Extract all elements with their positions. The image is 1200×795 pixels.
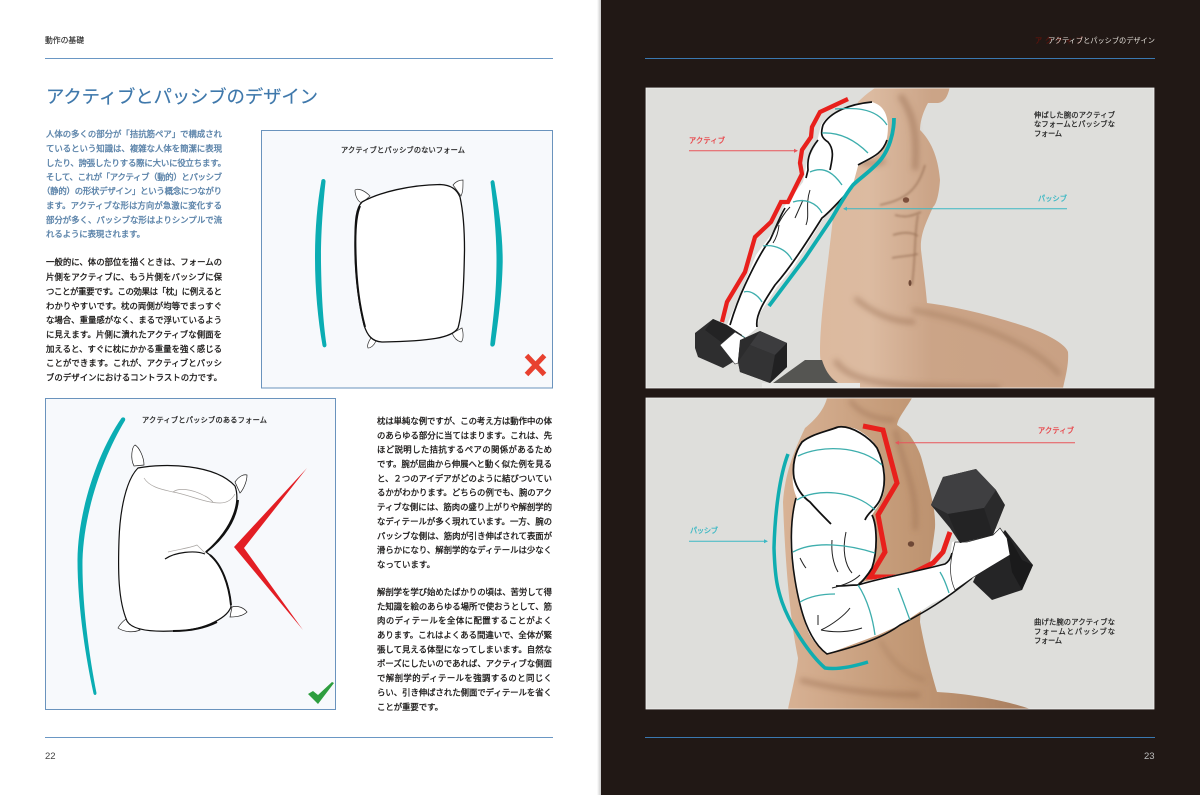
arm cross contours xyxy=(727,108,887,338)
active callout: アクティブ xyxy=(1038,426,1074,435)
pillow without weight xyxy=(355,184,464,342)
passive callout xyxy=(843,194,1067,211)
active callout: アクティブ xyxy=(689,136,725,145)
arm contour lines xyxy=(793,427,884,586)
arm contour lines xyxy=(730,102,887,327)
intro paragraph xyxy=(42,129,226,239)
intro paragraph: （静的）の形状デザイン」という概念につながり xyxy=(42,186,222,196)
torso xyxy=(820,86,1068,388)
grey crease lines xyxy=(144,478,235,553)
body column: further explanation xyxy=(377,416,553,712)
intro paragraph: 部分が多く、パッシブな形はよりシンプルで流 xyxy=(46,215,223,225)
icon: green check xyxy=(308,682,334,704)
thick active contour xyxy=(173,500,238,631)
body column: further explanation: ほど説明した拮抗するペアの関係があるため xyxy=(377,445,552,455)
drawn hand xyxy=(951,528,1010,590)
caption: extended arm: フォーム xyxy=(1034,129,1062,138)
body column: further explanation: ティブな側には、筋肉の盛り上がりや解剖学的 xyxy=(377,502,552,512)
body column: further explanation: なディテールが多く現れています。一方、腕の xyxy=(377,516,552,526)
intro paragraph: ます。アクティブな形は方向が急激に変化する xyxy=(46,200,222,210)
nipple xyxy=(908,541,914,547)
passive curve xyxy=(78,417,125,695)
caption: bent arm: フォームとパッシブな xyxy=(1034,627,1115,636)
body column: further explanation: のあらゆる部分に当てはまります。これは、先 xyxy=(377,430,552,440)
passive callout: パッシブ xyxy=(690,526,718,535)
hand xyxy=(720,332,745,364)
active callout xyxy=(689,136,798,153)
body paragraph: pillow example: 加えると、すぐに枕にかかる重量を強く感じる xyxy=(46,344,222,354)
abdominal detail xyxy=(880,165,925,285)
body column: further explanation: 解剖学を学び始めたばかりの頃は、苦労して得 xyxy=(377,587,552,597)
active callout xyxy=(895,426,1075,445)
squashed pillow xyxy=(119,466,237,631)
photo panel: bent arm xyxy=(646,398,1154,709)
pillow ears xyxy=(355,180,463,348)
photo panel: extended arm xyxy=(646,86,1154,388)
body column: further explanation: と、２つのアイデアがどのように結びついてい xyxy=(377,473,552,483)
intro paragraph: れるように表現されます。 xyxy=(46,229,145,239)
body column: further explanation: 張して見える体型になってしまいます。自然な xyxy=(377,644,552,654)
active contour xyxy=(722,99,848,322)
drawn bent arm xyxy=(790,427,1010,654)
left page number: 22 xyxy=(45,751,56,762)
nipple xyxy=(903,197,909,203)
bench xyxy=(773,360,838,383)
body column: further explanation: で解剖学的ディテールを強調するのと同じく xyxy=(377,673,552,683)
body column: further explanation: なっています。 xyxy=(377,560,435,570)
left passive stroke xyxy=(315,179,326,347)
body column: further explanation: た知識を絵のあらゆる場所で使おうとして、筋 xyxy=(377,601,552,611)
right running header: アクティブとパッシブのデザイン xyxy=(1048,36,1155,45)
right dumbbell head xyxy=(738,331,787,383)
active chevron xyxy=(234,468,307,630)
upper dumbbell head xyxy=(931,469,1005,543)
right page dark background xyxy=(601,0,1200,795)
body column: further explanation: 枕は単純な例ですが、この考え方は動作中の体 xyxy=(377,416,553,426)
active contour xyxy=(863,426,950,577)
caption: bent arm: フォーム xyxy=(1034,636,1062,645)
caption: bent arm xyxy=(1034,618,1115,645)
body paragraph: pillow example: 片側をアクティブに、もう片側をパッシブに保 xyxy=(46,272,223,282)
body column: further explanation: らい、引き伸ばされた側面でディテールを省く xyxy=(377,687,552,697)
right page number: 23 xyxy=(1144,751,1155,762)
intro paragraph: したり、誇張したりする際に大いに役立ちます。 xyxy=(46,158,226,168)
caption: extended arm xyxy=(1034,111,1116,138)
body column: further explanation: ポーズにしたいのであれば、アクティブな側面 xyxy=(377,659,552,669)
navel xyxy=(908,280,912,286)
panel: form without active and passive xyxy=(262,130,552,388)
page title: アクティブとパッシブのデザイン xyxy=(46,86,318,107)
intro paragraph: そして、これが「アクティブ（動的）とパッシブ xyxy=(46,172,223,182)
body paragraph: pillow example: に見えます。片側に潰れたアクティブな側面を xyxy=(46,330,222,340)
body column: further explanation: ことが重要です。 xyxy=(377,702,443,712)
intro paragraph: 人体の多くの部分が「拮抗筋ペア」で構成され xyxy=(46,129,223,139)
icon: red cross xyxy=(526,356,544,374)
left page background xyxy=(0,0,601,795)
body column: further explanation: あります。これはよくある間違いで、全体が緊 xyxy=(377,630,553,640)
body column: further explanation: 滑らかになり、解剖学的なディテールは少なく xyxy=(377,545,552,555)
caption: extended arm: なフォームとパッシブな xyxy=(1034,120,1115,129)
body column: further explanation: パッシブな側は、筋肉が引き伸ばされて表面が xyxy=(377,531,553,541)
body column: further explanation: 肉のディテールを全体に配置することがよく xyxy=(377,616,552,626)
body paragraph: pillow example: つことが重要です。この効果は「枕」に例えると xyxy=(46,286,222,296)
body paragraph: pillow example: ブのデザインにおけるコントラストの力です。 xyxy=(46,372,222,382)
body column: further explanation: るかがわかります。どちらの例でも、腕のアク xyxy=(377,488,552,498)
torso xyxy=(783,398,1030,709)
left running header: 動作の基礎 xyxy=(45,35,84,45)
body paragraph: pillow example: 一般的に、体の部位を描くときは、フォームの xyxy=(46,257,222,267)
caption: bent arm: 曲げた腕のアクティブな xyxy=(1034,618,1115,627)
right running header: アクティブ xyxy=(1035,36,1083,45)
inner fold line xyxy=(165,552,205,559)
left dumbbell head xyxy=(695,319,742,368)
right passive stroke xyxy=(490,180,503,347)
torso shading xyxy=(800,400,925,695)
passive callout: パッシブ xyxy=(1038,194,1067,203)
panel heading: アクティブとパッシブのあるフォーム xyxy=(142,416,267,425)
gutter shadow xyxy=(597,0,601,795)
drawn arm xyxy=(727,101,888,338)
arm cross contours xyxy=(792,448,950,636)
body paragraph: pillow example: な場合、重量感がなく、まるで浮いているよう xyxy=(46,315,222,325)
passive callout xyxy=(689,526,768,543)
caption: extended arm: 伸ばした腕のアクティブ xyxy=(1034,111,1116,120)
panel: form with active and passive xyxy=(46,398,336,710)
pillow ears xyxy=(118,445,247,632)
lower dumbbell head xyxy=(973,530,1033,600)
body paragraph: pillow example: ことができます。これが、アクティブとパッシ xyxy=(46,358,222,368)
passive contour xyxy=(774,454,868,669)
passive contour xyxy=(769,118,894,306)
torso shading xyxy=(835,95,1060,388)
body paragraph: pillow example xyxy=(46,257,223,382)
intro paragraph: ているという知識は、複雑な人体を簡潔に表現 xyxy=(46,143,223,153)
body column: further explanation: です。腕が屈曲から伸展へと動く似た例を見る xyxy=(377,459,552,469)
body paragraph: pillow example: わかりやすいです。枕の両側が均等でまっすぐ xyxy=(46,301,222,311)
panel heading: アクティブとパッシブのないフォーム xyxy=(341,146,465,155)
thick left contour xyxy=(355,206,365,327)
